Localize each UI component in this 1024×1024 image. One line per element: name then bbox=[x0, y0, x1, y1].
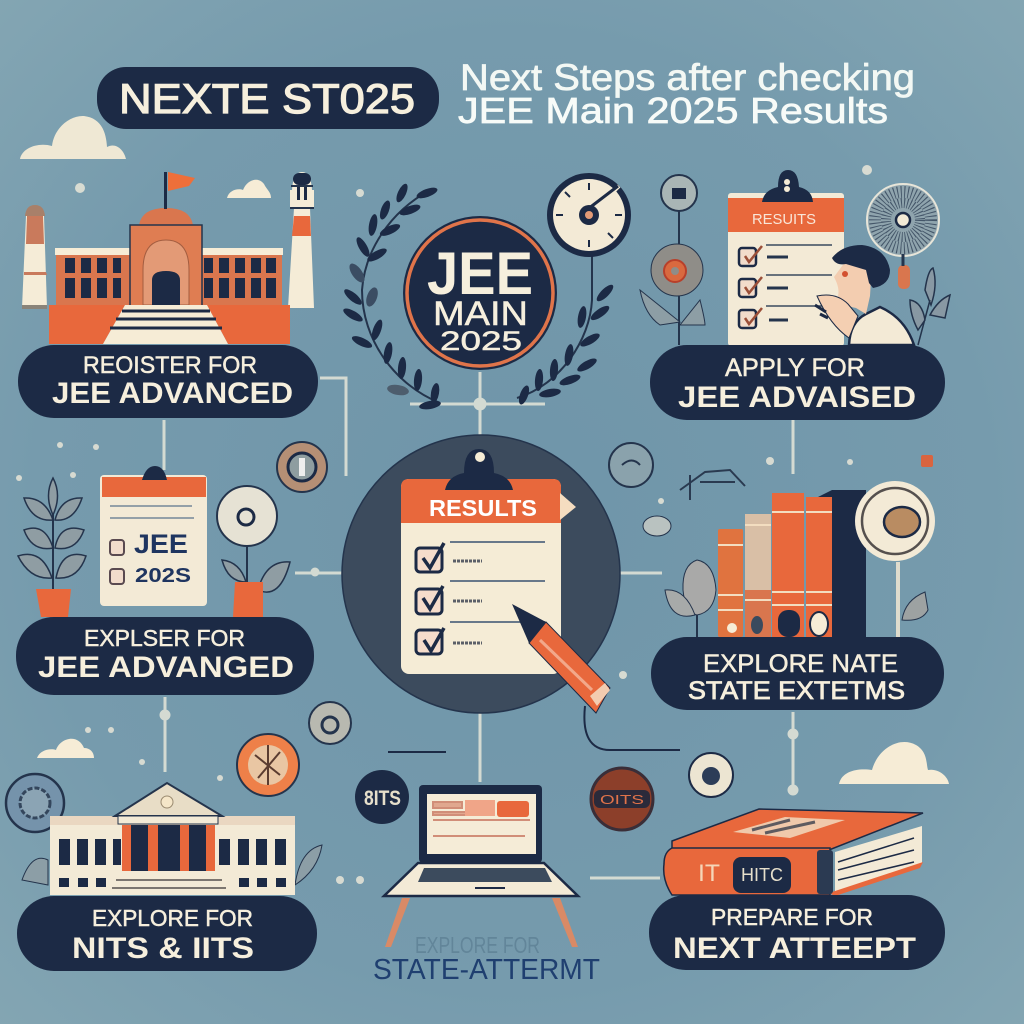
small scattered specks bbox=[16, 165, 872, 884]
panel: apply for JEE Advanced bbox=[640, 170, 950, 420]
label pill: APPLY FOR bbox=[725, 354, 865, 382]
icon: columned institute bbox=[22, 783, 322, 895]
label text: STATE-ATTERMT bbox=[373, 954, 600, 986]
label pill: EXPLSER FOR bbox=[84, 625, 245, 651]
icon: clock gauge bbox=[547, 173, 631, 257]
building wings bbox=[56, 248, 282, 306]
header pill bbox=[97, 67, 439, 129]
label pill: NEXT ATTEEPT bbox=[673, 932, 916, 965]
JEE Main 2025 circle: MAIN bbox=[433, 295, 528, 333]
central badge with laurel bbox=[341, 173, 631, 411]
icon: results clipboard: RESUITS bbox=[752, 211, 816, 228]
badge: top centre right outline bbox=[609, 443, 653, 487]
icon: JEE note clipboard: 202S bbox=[135, 565, 191, 587]
icon: pencil bbox=[512, 604, 610, 713]
icon: JEE note clipboard bbox=[100, 466, 207, 606]
dark connector from pencil bbox=[388, 706, 680, 752]
icon: thick book bbox=[664, 809, 923, 896]
label pill: STATE EXTETMS bbox=[688, 677, 905, 705]
icon: left plant bbox=[18, 478, 86, 617]
entrance tower bbox=[130, 225, 202, 307]
icon: results clipboard bbox=[728, 170, 844, 346]
title: Next Steps after checking bbox=[460, 57, 915, 98]
panel: JEE clipboard bbox=[16, 442, 327, 695]
icon: cream medal sign bbox=[855, 481, 935, 638]
cloud: top left bbox=[20, 116, 126, 159]
icon: orange dial coin bbox=[237, 734, 299, 796]
left tower bbox=[22, 205, 47, 309]
badge: dark circle bbox=[355, 770, 409, 824]
icon: orange coin bbox=[277, 442, 327, 492]
cloud: small bbox=[227, 180, 271, 198]
panel: explore NITs and IITs bbox=[6, 734, 322, 971]
icon: college building bbox=[22, 172, 314, 344]
icon: row of books bbox=[718, 490, 866, 637]
badge: cream circle bbox=[689, 753, 733, 797]
label pill: EXPLORE FOR bbox=[92, 905, 253, 931]
icon: person reading bbox=[815, 245, 914, 345]
connector lines bbox=[161, 372, 797, 878]
label pill bbox=[649, 895, 945, 970]
header pill: NEXTE ST025 bbox=[119, 75, 415, 122]
panel: laptop explore state bbox=[373, 785, 600, 986]
icon: magnifier plant bbox=[217, 486, 290, 617]
label pill: NITS & IITS bbox=[72, 932, 254, 965]
icon: plant with target bbox=[640, 175, 705, 345]
label pill bbox=[650, 345, 945, 420]
label pill bbox=[18, 345, 318, 418]
cloud: lower right bbox=[839, 742, 949, 784]
icon: right leaf plant bbox=[910, 268, 950, 345]
icon: laptop on desk bbox=[384, 785, 578, 947]
icon: thick book: HITC bbox=[741, 865, 783, 885]
badge: orange dark circle bbox=[591, 768, 653, 830]
icon: JEE note clipboard: JEE bbox=[134, 529, 188, 559]
icon: thick book: IT bbox=[698, 860, 720, 887]
panel: register for JEE Advanced bbox=[18, 172, 318, 418]
label text: EXPLORE FOR bbox=[415, 932, 540, 958]
label pill: REOISTER FOR bbox=[83, 352, 257, 379]
label pill: JEE ADVANGED bbox=[38, 651, 294, 684]
steps bbox=[103, 305, 228, 344]
badge: orange dark circle: OITS bbox=[600, 792, 644, 807]
label pill: PREPARE FOR bbox=[711, 904, 873, 930]
title bbox=[458, 57, 915, 131]
panel: prepare for next attempt bbox=[649, 742, 949, 970]
label pill: JEE ADVANCED bbox=[52, 377, 293, 410]
label pill bbox=[16, 617, 314, 695]
right tower bbox=[288, 172, 314, 308]
dark circle bbox=[342, 435, 620, 713]
label pill: JEE ADVAISED bbox=[678, 381, 916, 414]
scattered small badges bbox=[309, 443, 933, 830]
badge: lock doodle bbox=[680, 470, 745, 500]
label pill bbox=[17, 896, 317, 971]
label text bbox=[373, 932, 600, 986]
icon: round fan bbox=[867, 184, 939, 289]
windows bbox=[65, 258, 276, 298]
icon: small tree bbox=[665, 560, 716, 637]
laurel wreath bbox=[341, 182, 616, 411]
JEE Main 2025 circle: JEE bbox=[427, 240, 533, 307]
label pill bbox=[651, 637, 944, 710]
dome and flag bbox=[139, 172, 195, 225]
panel: central results clipboard bbox=[342, 435, 620, 713]
JEE Main 2025 circle: 2025 bbox=[440, 326, 522, 356]
clipboard sheet bbox=[401, 449, 576, 674]
JEE Main 2025 circle bbox=[403, 216, 557, 370]
badge: dark circle: 8ITS bbox=[364, 787, 401, 810]
label pill: EXPLORE NATE bbox=[703, 650, 898, 678]
cloud: lower left bbox=[37, 739, 94, 758]
title: JEE Main 2025 Results bbox=[458, 90, 888, 131]
panel: explore state exams bbox=[651, 481, 944, 710]
icon: blue brain coin bbox=[6, 774, 64, 832]
badge: grey circle bbox=[309, 702, 351, 744]
base wall bbox=[49, 305, 290, 344]
badge: small chip bbox=[643, 516, 671, 536]
clipboard sheet: RESULTS bbox=[429, 495, 537, 521]
badge: small red lock bbox=[921, 455, 933, 467]
